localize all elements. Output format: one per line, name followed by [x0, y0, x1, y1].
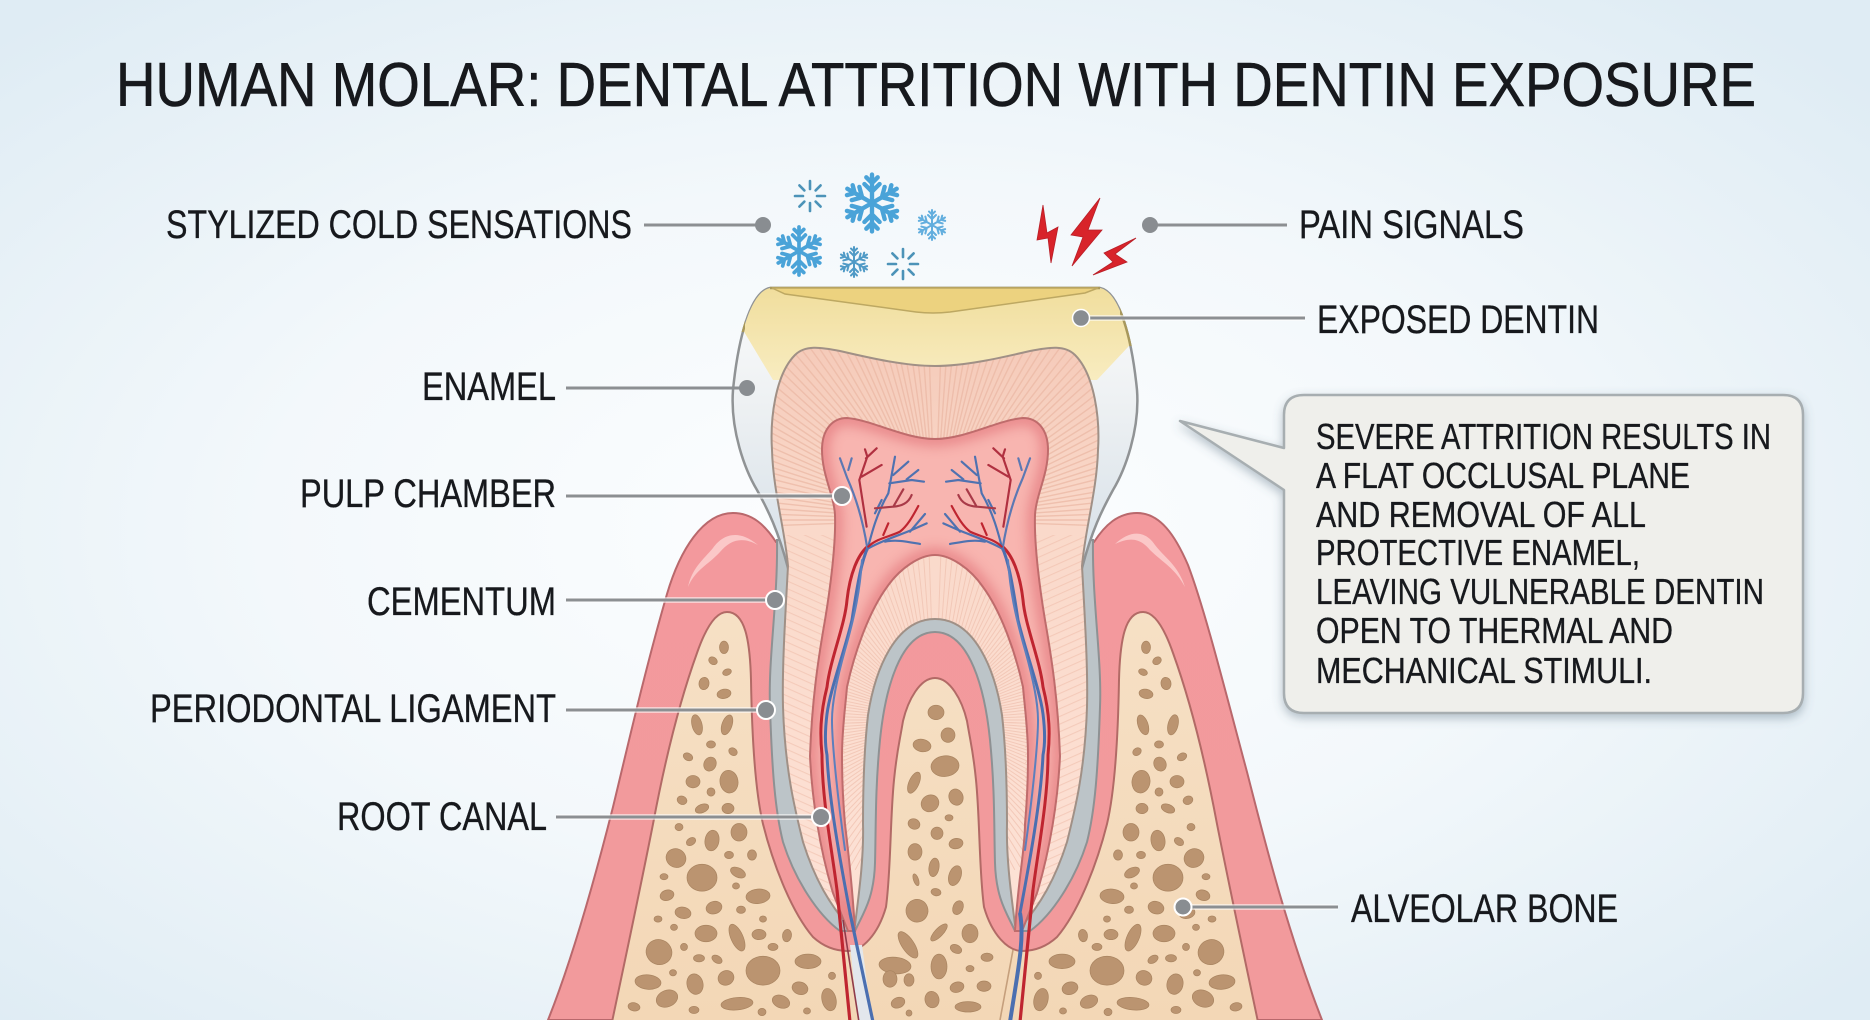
blood vessels and nerves	[821, 448, 1049, 1020]
dentin	[770, 346, 1100, 926]
callout	[1180, 395, 1803, 713]
enamel	[733, 288, 1137, 568]
callout: LEAVING VULNERABLE DENTIN	[1316, 571, 1764, 612]
callout: AND REMOVAL OF ALL	[1316, 494, 1646, 535]
icon: small snowflake right	[917, 210, 947, 240]
label: stylized cold sensations: STYLIZED COLD SENSATIONS	[166, 203, 632, 247]
icon: medium snowflake	[775, 227, 823, 275]
label: periodontal ligament: PERIODONTAL LIGAMENT	[150, 687, 556, 731]
label: root canal: ROOT CANAL	[337, 795, 547, 839]
label: cementum: CEMENTUM	[367, 580, 556, 624]
callout: A FLAT OCCLUSAL PLANE	[1316, 455, 1690, 496]
icon: sparkle low	[888, 249, 918, 279]
label: exposed dentin: EXPOSED DENTIN	[1317, 298, 1599, 342]
callout: SEVERE ATTRITION RESULTS IN	[1316, 416, 1771, 457]
label: pain signals	[1142, 203, 1524, 247]
label: pulp chamber: PULP CHAMBER	[300, 472, 556, 516]
icon: small snowflake low	[839, 247, 869, 277]
label: pulp chamber	[300, 472, 851, 516]
label: exposed dentin	[1072, 298, 1599, 342]
icon: cold sensation snowflakes	[775, 174, 947, 279]
label: root canal	[337, 795, 830, 839]
label: alveolar bone: ALVEOLAR BONE	[1351, 887, 1618, 931]
label: cementum	[367, 580, 784, 624]
icon: sparkle top	[795, 181, 825, 211]
cementum	[770, 540, 1100, 931]
tooth anatomy illustration	[548, 270, 1322, 1020]
label: enamel: ENAMEL	[422, 365, 556, 409]
label: alveolar bone	[1174, 887, 1618, 931]
gum tissue	[548, 513, 1322, 1020]
icon: pain signal lightning bolts	[1037, 198, 1136, 275]
callout: OPEN TO THERMAL AND	[1316, 610, 1673, 651]
callout: PROTECTIVE ENAMEL,	[1316, 532, 1640, 573]
alveolar bone	[612, 612, 1258, 1020]
label: pain signals: PAIN SIGNALS	[1299, 203, 1524, 247]
canal channel through bone	[850, 945, 1013, 1020]
callout: MECHANICAL STIMULI.	[1316, 650, 1652, 691]
label: enamel	[422, 365, 755, 409]
icon: large snowflake	[844, 174, 900, 232]
pulp chamber	[810, 418, 1060, 931]
exposed dentin	[742, 286, 1132, 380]
